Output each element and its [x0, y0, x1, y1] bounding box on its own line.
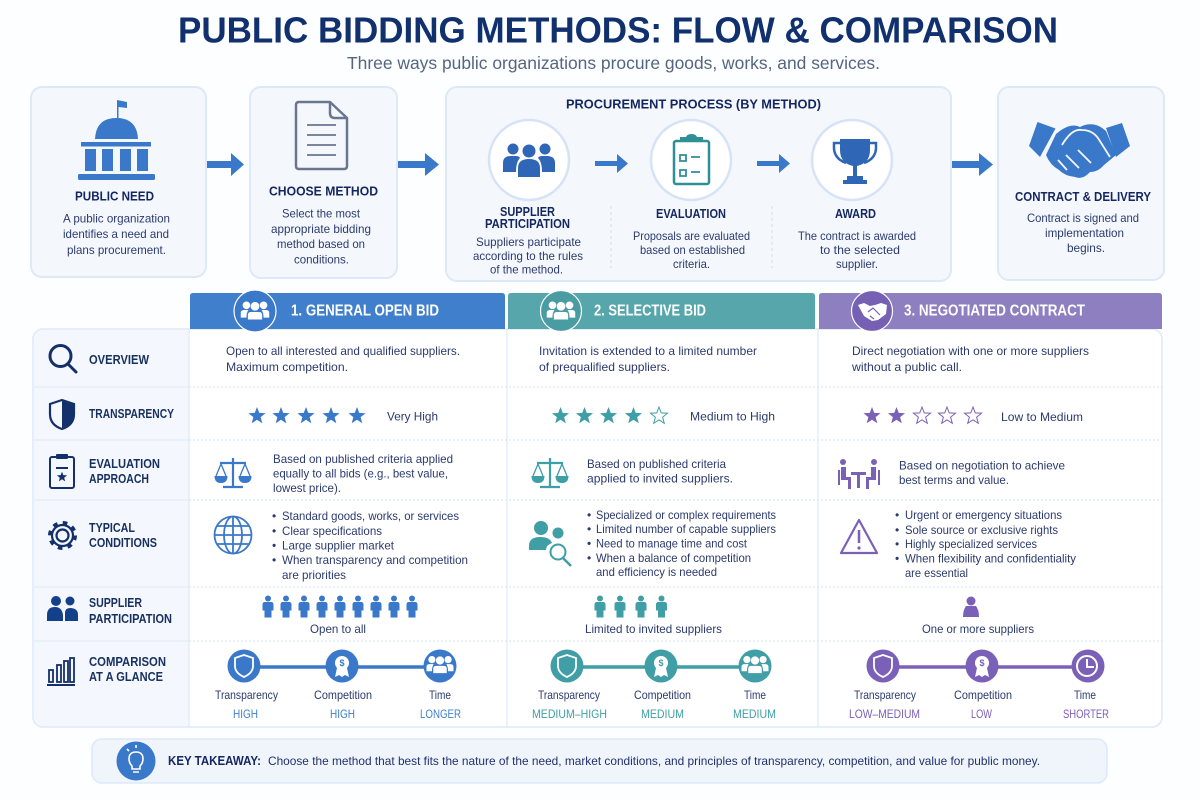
step: award: The contract is awarded	[798, 229, 916, 243]
icon: government building	[78, 100, 155, 180]
icon: scales	[532, 458, 568, 487]
icon: document	[296, 102, 347, 169]
icon: people search	[529, 521, 571, 566]
heading: public need: PUBLIC NEED	[75, 190, 154, 204]
list: conditions: and efficiency is needed	[596, 565, 717, 579]
title: PUBLIC BIDDING METHODS: FLOW & COMPARISON	[178, 10, 1058, 50]
text: evaluation	[587, 457, 733, 486]
text: choose method description: conditions.	[294, 252, 349, 266]
icon: light bulb	[116, 742, 156, 780]
rating: very high: Very High	[387, 410, 438, 424]
panel: procurement process	[446, 87, 951, 281]
list: conditions: are priorities	[282, 568, 346, 582]
text: overview: without a public call.	[851, 360, 962, 374]
text: choose method description: method based on	[277, 237, 365, 251]
row label: overview	[50, 346, 149, 372]
list: conditions: •	[895, 523, 899, 537]
text: overview: Direct negotiation with one or more suppliers	[852, 344, 1089, 358]
comparison strip: selective bid: $	[658, 658, 664, 668]
row label: comparison at a glance	[47, 655, 166, 685]
arrow: process to contract	[952, 153, 993, 176]
list: conditions: Specialized or complex requirements	[596, 508, 776, 522]
step: supplier participation: of the method.	[490, 262, 563, 276]
list: conditions: •	[587, 508, 591, 522]
arrow: evaluation to award	[757, 154, 790, 173]
row label: typical conditions	[50, 521, 157, 550]
icon: scales	[214, 458, 252, 487]
step: supplier participation: Suppliers participate	[476, 235, 581, 249]
step: award: supplier.	[836, 257, 878, 271]
text: public need description: A public organization	[63, 212, 170, 226]
text: overview: Maximum competition.	[226, 360, 348, 374]
row label: typical conditions: TYPICAL	[89, 521, 135, 535]
comparison strip: open bid: Time	[429, 688, 451, 702]
comparison strip: open bid: $	[339, 658, 345, 668]
step: supplier participation	[473, 120, 583, 276]
comparison strip: selective bid: MEDIUM	[641, 707, 684, 721]
text: choose method description	[271, 206, 371, 266]
rating: low to medium	[863, 407, 1083, 424]
text: evaluation: applied to invited suppliers.	[587, 472, 733, 486]
text: public need description: plans procurement.	[67, 243, 166, 257]
comparison strip: negotiated contract: Time	[1074, 688, 1096, 702]
row label: evaluation approach: APPROACH	[89, 472, 149, 486]
row label: typical conditions: CONDITIONS	[89, 536, 157, 550]
step: evaluation: EVALUATION	[656, 207, 726, 221]
list: conditions: are essential	[905, 566, 968, 580]
list: conditions: Urgent or emergency situations	[905, 508, 1062, 522]
column header: negotiated contract: 3. NEGOTIATED CONTRACT	[904, 302, 1085, 320]
text: contract description: Contract is signed and	[1027, 211, 1139, 225]
list: conditions: •	[272, 538, 276, 552]
row label: evaluation approach: EVALUATION	[89, 457, 160, 471]
list: conditions: Large supplier market	[282, 538, 395, 552]
list: conditions	[272, 509, 468, 582]
column header: negotiated contract	[819, 290, 1162, 332]
step: supplier participation: SUPPLIER	[500, 205, 555, 219]
icon: trophy	[834, 139, 876, 184]
comparison strip: selective bid: Transparency	[538, 688, 600, 702]
text: contract description: begins.	[1067, 241, 1105, 255]
icon: globe	[214, 516, 252, 554]
list: conditions: •	[895, 552, 899, 566]
panel: row labels	[34, 330, 189, 726]
panel: choose method	[250, 87, 397, 278]
subtitle: Three ways public organizations procure goods, works, and services.	[347, 53, 880, 73]
comparison strip: negotiated contract	[849, 650, 1109, 721]
icon: negotiation table	[838, 459, 880, 489]
column: negotiated contract	[819, 290, 1162, 721]
comparison strip: open bid	[215, 650, 461, 721]
callout: key takeaway	[92, 739, 1107, 783]
heading: choose method: CHOOSE METHOD	[269, 184, 378, 198]
list: conditions: When flexibility and confidentiality	[905, 552, 1076, 566]
comparison strip: open bid: Transparency	[215, 688, 278, 702]
column: selective bid	[508, 290, 815, 721]
column header: selective bid: 2. SELECTIVE BID	[594, 302, 706, 320]
icon: supplier group	[503, 144, 555, 177]
participation: one or more	[922, 596, 1034, 636]
text: contract description	[1027, 211, 1139, 255]
participation: limited	[585, 596, 722, 636]
comparison strip: negotiated contract: LOW–MEDIUM	[849, 707, 920, 721]
comparison strip: open bid: LONGER	[420, 707, 461, 721]
text: public need description	[63, 212, 170, 257]
text: evaluation: Based on published criteria	[587, 457, 726, 471]
list: conditions: Clear specifications	[282, 524, 382, 538]
comparison strip: negotiated contract: $	[979, 658, 985, 668]
arrow: method to process	[398, 153, 439, 176]
icon: handshake	[1029, 122, 1130, 178]
row label: supplier participation	[47, 596, 172, 626]
arrow: need to method	[207, 153, 244, 176]
list: conditions: When transparency and competition	[282, 553, 468, 567]
participation: limited: Limited to invited suppliers	[585, 622, 722, 636]
step: evaluation: criteria.	[673, 257, 710, 271]
panel: public need	[31, 87, 206, 277]
text: key takeaway: KEY TAKEAWAY:	[168, 754, 261, 768]
text: evaluation	[899, 458, 1065, 487]
comparison strip: open bid: HIGH	[233, 707, 258, 721]
row label: comparison at a glance: AT A GLANCE	[89, 670, 163, 684]
list: conditions: When a balance of competition	[596, 551, 751, 565]
arrow: participation to evaluation	[595, 154, 628, 173]
heading: contract and delivery: CONTRACT & DELIVERY	[1015, 190, 1152, 204]
comparison strip: negotiated contract: Transparency	[854, 688, 916, 702]
panel: contract and delivery	[998, 87, 1164, 280]
rating: low to medium: Low to Medium	[1001, 410, 1083, 424]
column header: selective bid	[508, 290, 815, 332]
text: overview	[851, 344, 1089, 374]
text: overview: Open to all interested and qualified suppliers.	[226, 344, 460, 358]
list: conditions: •	[272, 553, 276, 567]
step: award: to the selected	[820, 243, 900, 257]
list: conditions	[895, 508, 1076, 580]
text: evaluation	[273, 452, 453, 495]
step: award	[798, 120, 916, 271]
text: contract description: implementation	[1045, 226, 1124, 240]
rating: medium to high: Medium to High	[690, 410, 775, 424]
comparison strip: selective bid	[532, 650, 776, 721]
comparison strip: negotiated contract: SHORTER	[1063, 707, 1109, 721]
row label: overview: OVERVIEW	[89, 353, 149, 367]
comparison strip: selective bid: Time	[744, 688, 766, 702]
rating: medium to high	[552, 407, 775, 424]
comparison table	[33, 290, 1162, 727]
step: supplier participation: PARTICIPATION	[485, 217, 570, 231]
text: overview	[539, 344, 757, 374]
row label: evaluation approach	[50, 454, 160, 488]
comparison strip: selective bid: MEDIUM	[733, 707, 776, 721]
step: evaluation	[633, 120, 750, 271]
icon: warning triangle	[841, 520, 877, 553]
comparison strip: open bid: HIGH	[330, 707, 355, 721]
participation: one or more: One or more suppliers	[922, 622, 1034, 636]
list: conditions	[587, 508, 776, 579]
comparison strip: negotiated contract: LOW	[971, 707, 993, 721]
comparison strip: selective bid: Competition	[634, 688, 691, 702]
participation: open to all	[262, 596, 418, 636]
text: choose method description: appropriate bidding	[271, 222, 371, 236]
text: overview: of prequalified suppliers.	[539, 360, 670, 374]
text: choose method description: Select the most	[282, 206, 361, 220]
list: conditions: Sole source or exclusive rights	[905, 523, 1058, 537]
list: conditions: Standard goods, works, or services	[282, 509, 459, 523]
text: overview: Invitation is extended to a limited number	[539, 344, 757, 358]
text: evaluation: Based on negotiation to achieve	[899, 458, 1065, 472]
list: conditions: Need to manage time and cost	[596, 536, 748, 550]
column header: general open bid: 1. GENERAL OPEN BID	[291, 302, 439, 320]
column header: general open bid	[190, 290, 505, 332]
row label: transparency: TRANSPARENCY	[89, 407, 175, 421]
comparison strip: open bid: Competition	[314, 688, 372, 702]
list: conditions: Highly specialized services	[905, 537, 1037, 551]
text: key takeaway: Choose the method that best fits the nature of the need, market conditions, and principles of transparency, competition, and value for public money.	[268, 754, 1040, 768]
list: conditions: •	[895, 537, 899, 551]
step: award: AWARD	[835, 207, 876, 221]
row label: transparency	[50, 400, 175, 429]
list: conditions: Limited number of capable suppliers	[596, 522, 776, 536]
row label: supplier participation: SUPPLIER	[89, 596, 142, 610]
list: conditions: •	[587, 522, 591, 536]
list: conditions: •	[272, 524, 276, 538]
step: supplier participation: according to the rules	[473, 249, 583, 263]
text: evaluation: best terms and value.	[899, 473, 1009, 487]
step: evaluation: based on established	[640, 243, 745, 257]
text: overview	[226, 344, 460, 374]
list: conditions: •	[272, 509, 276, 523]
rating: very high	[248, 407, 438, 424]
participation: open to all: Open to all	[310, 622, 366, 636]
step: evaluation: Proposals are evaluated	[633, 229, 750, 243]
row label: comparison at a glance: COMPARISON	[89, 655, 166, 669]
row label: supplier participation: PARTICIPATION	[89, 612, 172, 626]
list: conditions: •	[587, 551, 591, 565]
list: conditions: •	[895, 508, 899, 522]
comparison strip: negotiated contract: Competition	[954, 688, 1012, 702]
icon: clipboard checklist	[674, 134, 709, 184]
text: evaluation: equally to all bids (e.g., best value,	[273, 466, 448, 480]
text: evaluation: Based on published criteria applied	[273, 452, 453, 466]
column: general open bid	[190, 290, 505, 721]
text: public need description: identifies a need and	[63, 227, 169, 241]
text: evaluation: lowest price).	[273, 481, 341, 495]
heading: procurement process: PROCUREMENT PROCESS (BY METHOD)	[566, 98, 821, 112]
comparison strip: selective bid: MEDIUM–HIGH	[532, 707, 607, 721]
list: conditions: •	[587, 536, 591, 550]
